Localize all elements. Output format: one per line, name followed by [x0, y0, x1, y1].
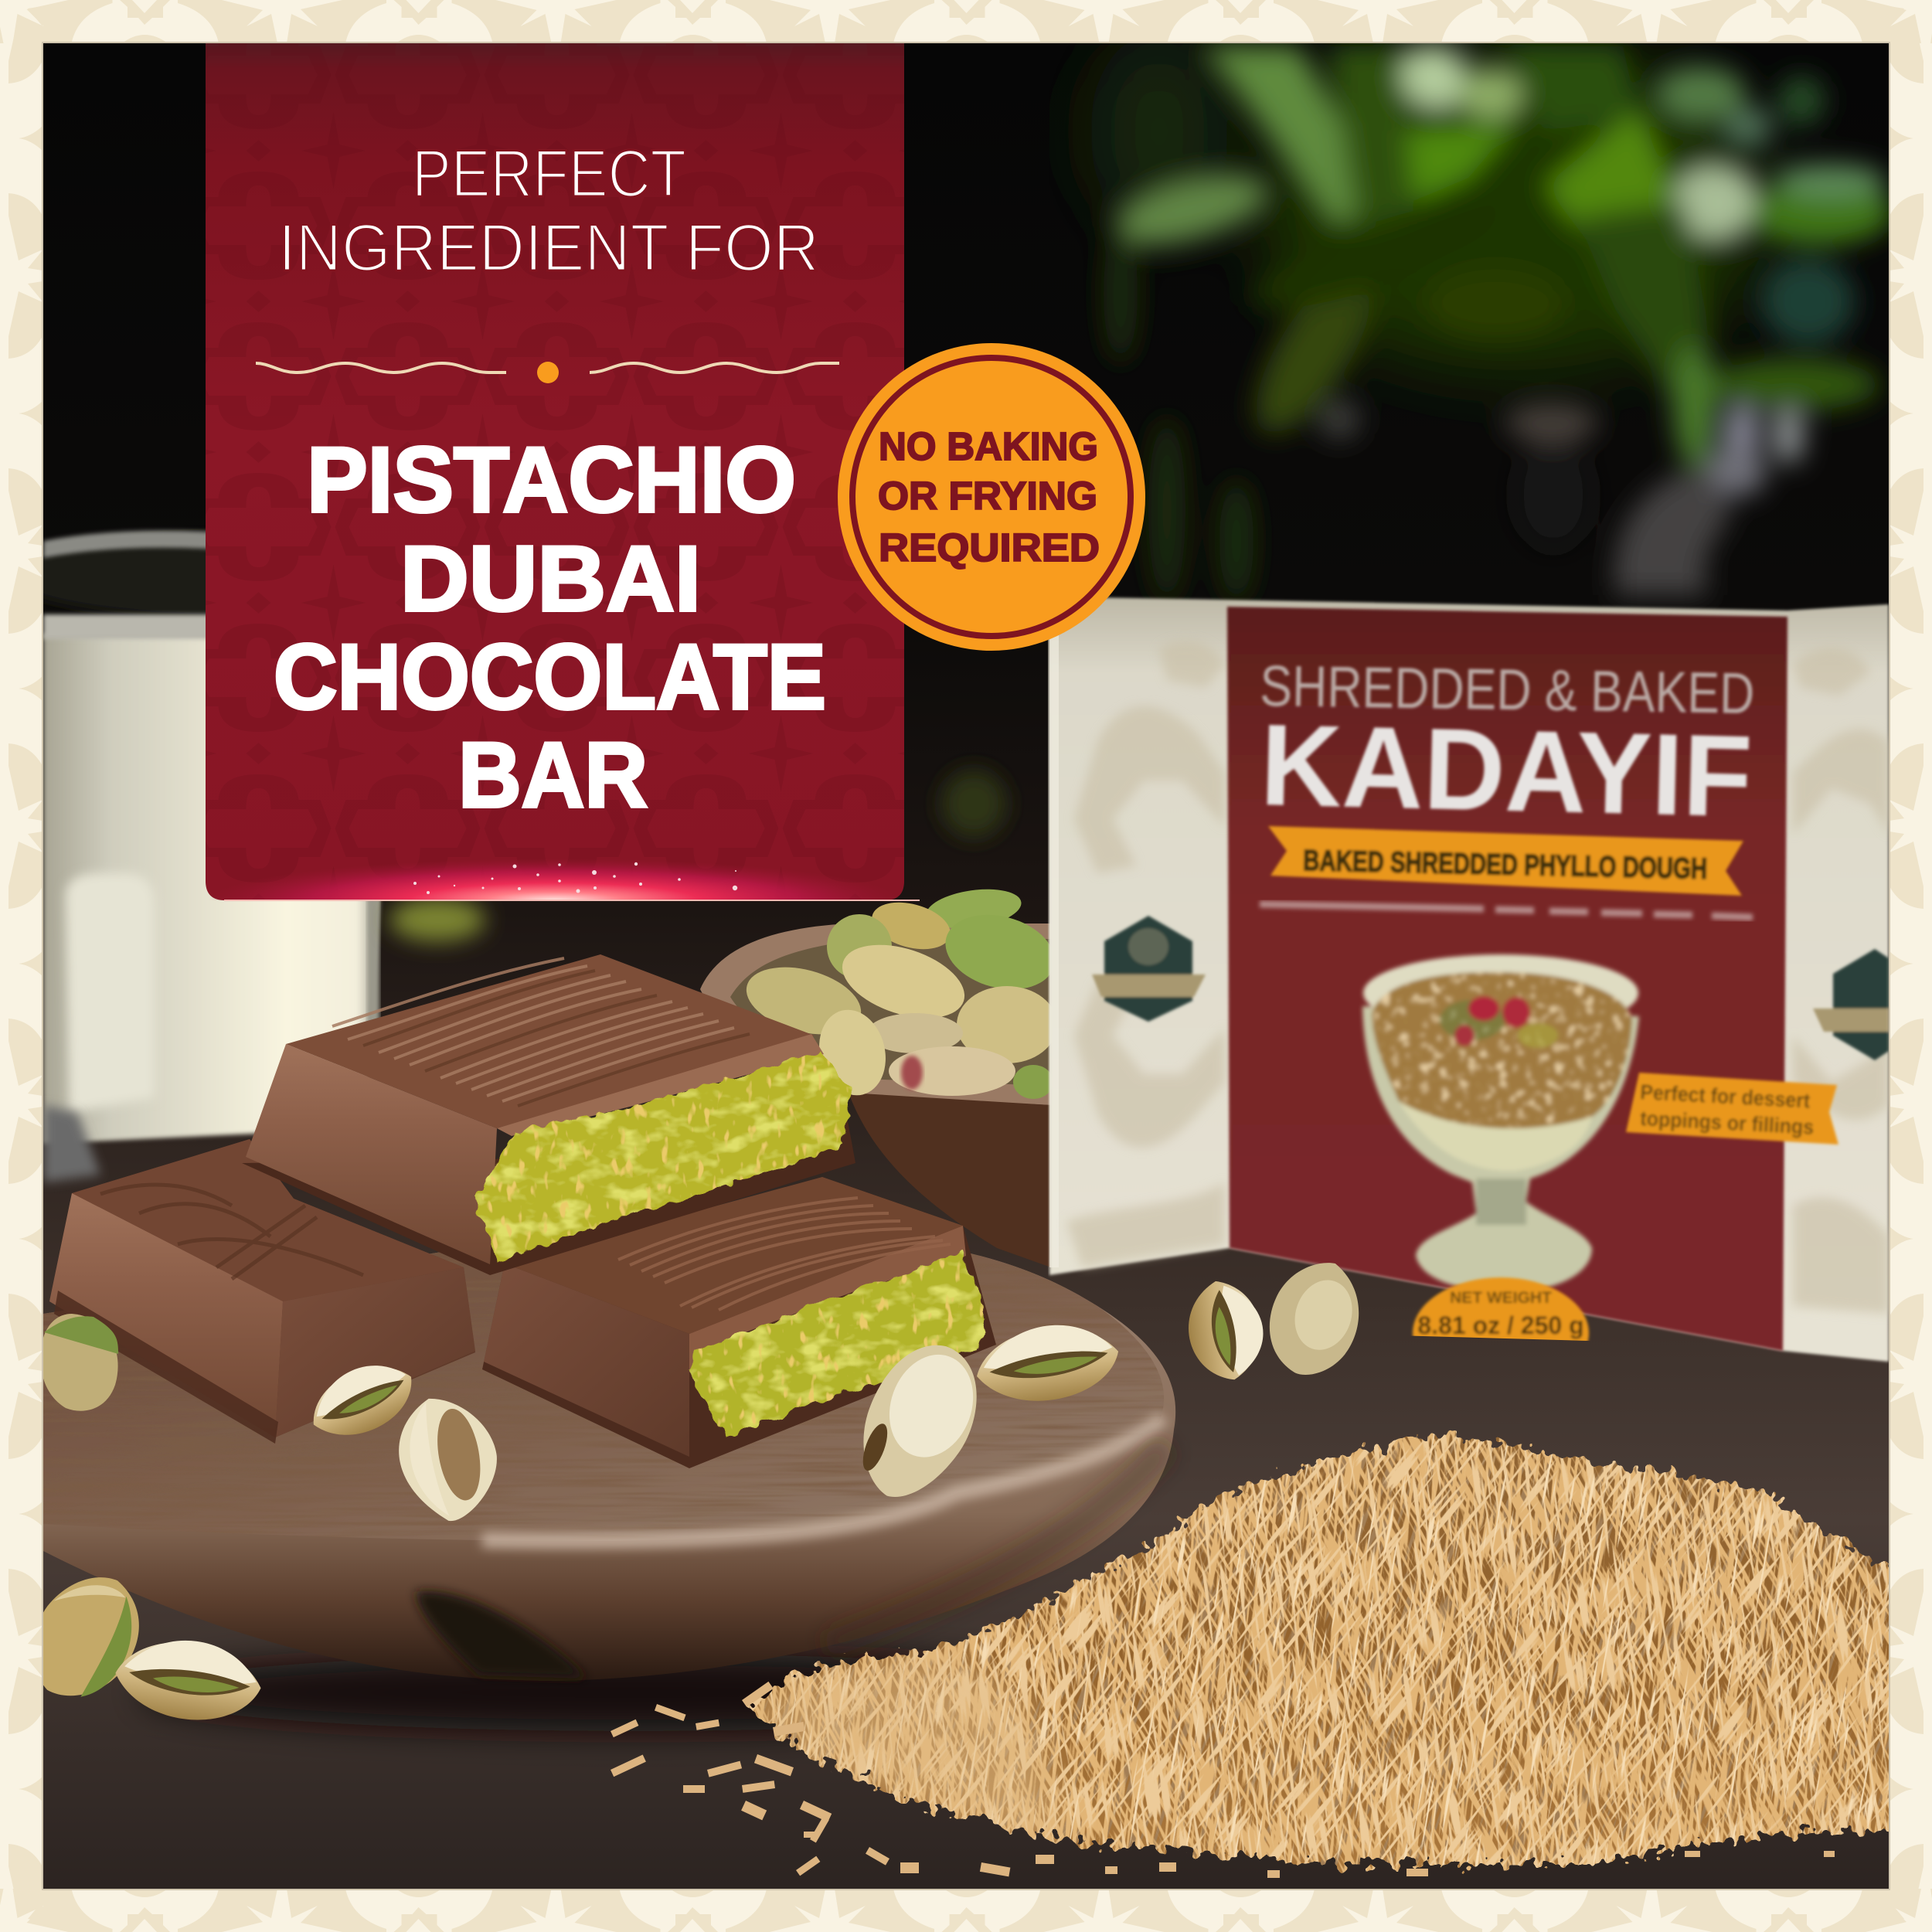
- pistachios in bowl: [739, 884, 1063, 1102]
- orange no baking badge: REQUIRED: [879, 526, 1100, 570]
- blurred green plant: [1090, 31, 1893, 603]
- box orange side tag: [1626, 1073, 1838, 1145]
- intro text: [278, 137, 819, 285]
- box logo right: [1813, 949, 1889, 1060]
- pistachio upright on board: [843, 1329, 995, 1515]
- box net weight badge: NET WEIGHT: [1450, 1289, 1552, 1307]
- pistachios lower left: [11, 1556, 266, 1729]
- intro text: PERFECT: [412, 137, 686, 211]
- pistachio pair on board: [300, 1349, 507, 1528]
- pistachio pair in front of box: [1182, 1250, 1374, 1387]
- red headline panel: [206, 43, 920, 901]
- out-of-focus pistachios behind the bars: [389, 770, 1006, 941]
- kadayif pile: [696, 1391, 1889, 1889]
- box red front panel: [1227, 607, 1787, 1351]
- pistachio left edge: [40, 1314, 118, 1411]
- box lattice pattern: [1066, 641, 1889, 1314]
- main headline: DUBAI: [400, 527, 701, 631]
- box orange side tag: Perfect for dessert: [1640, 1080, 1811, 1113]
- main headline: CHOCOLATE: [274, 625, 826, 729]
- chocolate bar: lower right: [482, 1177, 996, 1468]
- box orange ribbon: BAKED SHREDDED PHYLLO DOUGH: [1303, 845, 1708, 886]
- kadayif package box: [1048, 597, 1889, 1389]
- box heading: kadayif: KADAYIF: [1259, 699, 1753, 842]
- main headline: BAR: [458, 723, 648, 827]
- wooden serving board: [43, 1236, 1175, 1731]
- orange no baking badge: NO BAKING: [879, 424, 1098, 468]
- box heading: shredded and baked: SHREDDED & BAKED: [1260, 653, 1755, 726]
- box orange ribbon: [1268, 826, 1743, 896]
- pistachio kadayif filling: [689, 1253, 989, 1437]
- main headline: PISTACHIO: [307, 428, 796, 532]
- chocolate bar: left back: [49, 1139, 475, 1444]
- box net weight badge: 8.81 oz / 250 g: [1417, 1311, 1584, 1339]
- box logo left: [1092, 916, 1206, 1022]
- wooden bowl of pistachios: [700, 884, 1063, 1267]
- chocolate bar: top: [242, 954, 855, 1275]
- pistachio right on board: [971, 1317, 1124, 1410]
- main headline: [274, 428, 826, 827]
- box net weight badge: [1413, 1277, 1589, 1389]
- orange no baking badge: [838, 343, 1145, 651]
- wavy divider with dot: [256, 362, 839, 383]
- glass of milk: [8, 531, 456, 1182]
- box dessert cup: [1362, 954, 1639, 1292]
- orange no baking badge: OR FRYING: [878, 474, 1097, 518]
- box orange side tag: toppings or fillings: [1640, 1107, 1815, 1139]
- scattered kadayif crumbs: [611, 1682, 1835, 1878]
- intro text: INGREDIENT FOR: [278, 211, 819, 285]
- panel bottom glow with sparkles: [209, 859, 920, 901]
- pistachio kadayif filling: [475, 1053, 852, 1261]
